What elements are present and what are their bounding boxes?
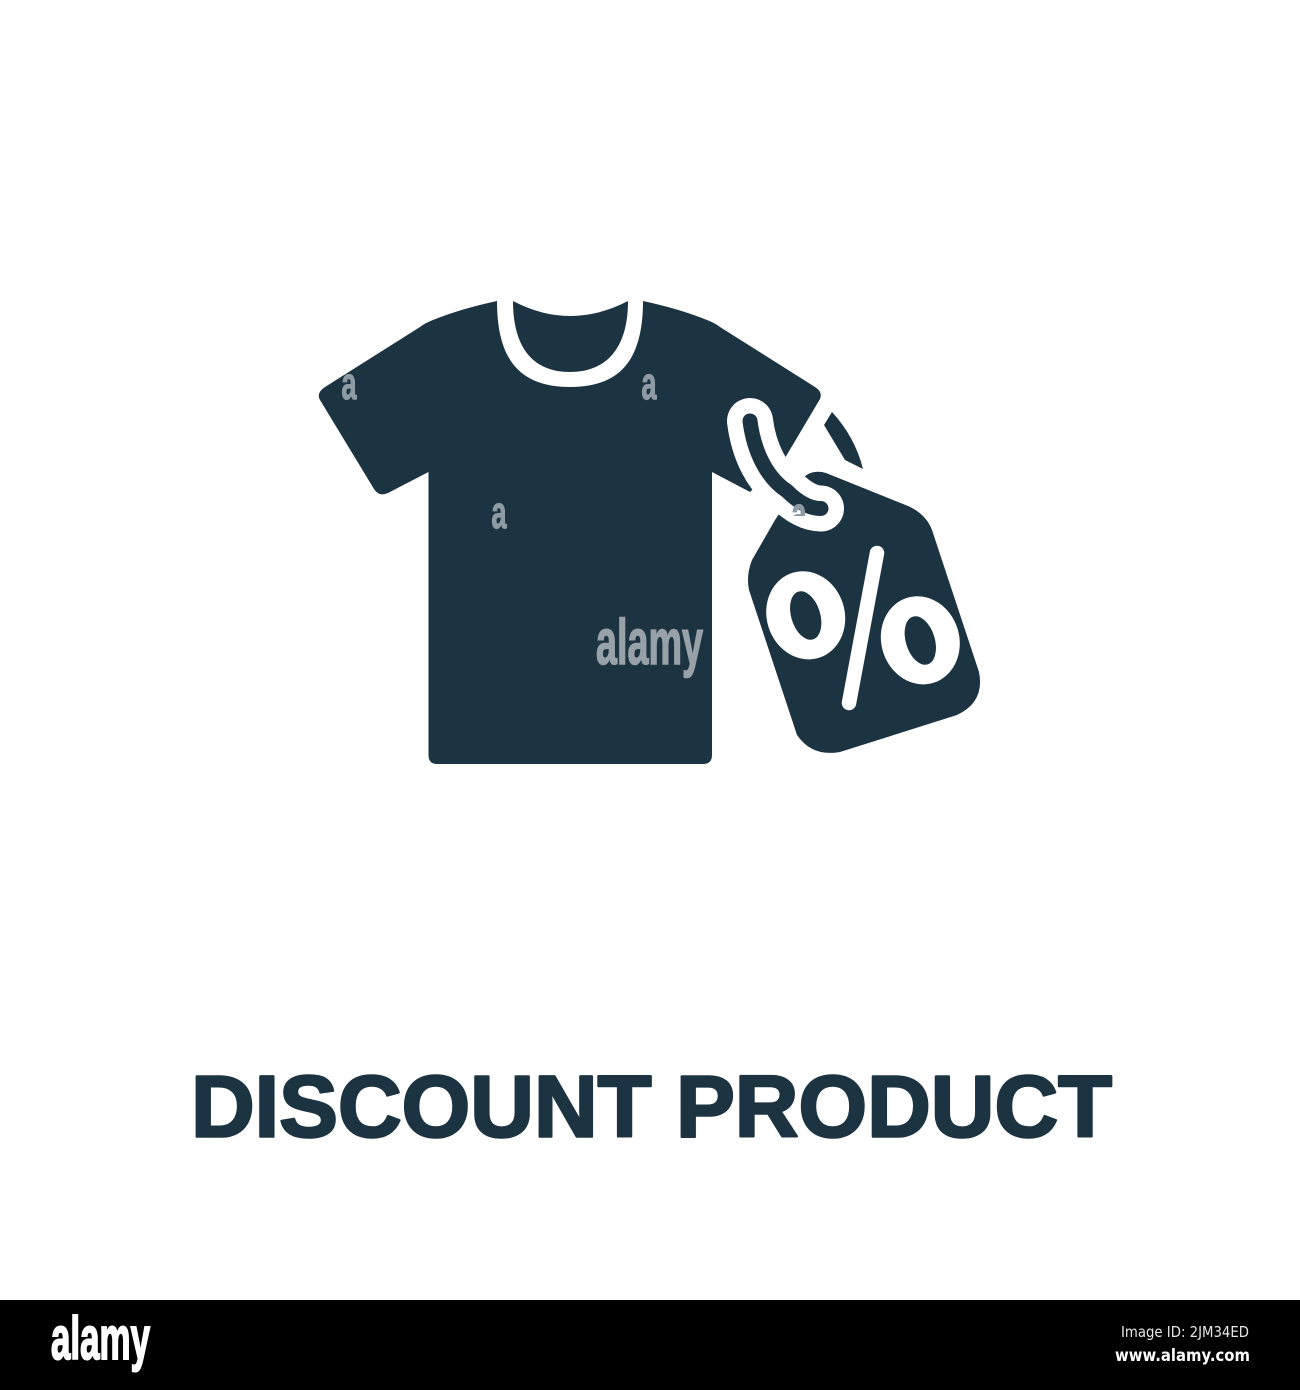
icon: percent sign on tag <box>755 553 971 703</box>
icon: sleeve arc behind tag <box>824 412 863 469</box>
website url: www.alamy.com <box>1115 1346 1250 1366</box>
icon: price tag <box>748 472 980 753</box>
watermark: small letters on shirt: a <box>492 487 507 538</box>
footer bar <box>0 1300 1300 1390</box>
icon: t-shirt with discount tag <box>319 301 980 764</box>
watermark: alamy logo on shirt: alamy <box>596 606 703 678</box>
footer logo: alamy <box>51 1305 150 1372</box>
watermark: small letters on shirt <box>342 374 806 530</box>
image id: Image ID: 2JM34ED <box>1121 1323 1249 1341</box>
icon: tag string <box>750 421 821 508</box>
icon: t-shirt <box>319 301 821 764</box>
title: DISCOUNT PRODUCT <box>191 1058 1112 1156</box>
watermark: small letters on shirt: a <box>642 358 657 409</box>
watermark: small letters on shirt: a <box>342 358 357 409</box>
watermark: small letters on shirt: a <box>792 488 807 539</box>
